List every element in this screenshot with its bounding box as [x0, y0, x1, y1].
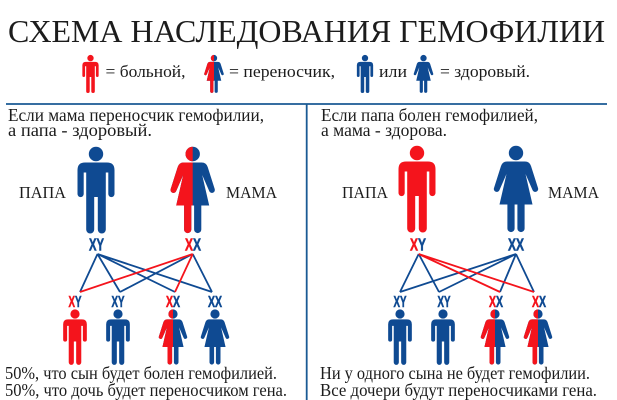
conclusion text: 50%, что дочь будет переносчиком гена. [5, 380, 287, 400]
icon: healthy daughter [201, 309, 229, 365]
icon: healthy son [106, 309, 130, 365]
icon: carrier daughter [159, 309, 187, 365]
icon: healthy woman [414, 55, 433, 93]
icon: mother carrier [171, 147, 215, 233]
conclusion text: 50%, что сын будет болен гемофилией. [5, 363, 277, 383]
chromosomes: mother: XX [185, 234, 201, 254]
chromosomes: child 3: XX [489, 294, 503, 311]
inheritance lines [400, 254, 534, 292]
label: mother: МАМА [226, 183, 278, 202]
chromosomes: child 1: XY [68, 294, 82, 311]
title: СХЕМА НАСЛЕДОВАНИЯ ГЕМОФИЛИИ [8, 13, 605, 49]
icon: carrier daughter 1 [481, 309, 509, 365]
icon: carrier woman [204, 55, 224, 93]
icon: healthy son 2 [431, 309, 455, 365]
icon: mother healthy [494, 146, 538, 232]
panel: father sick [320, 105, 600, 400]
label: father: ПАПА [19, 183, 67, 202]
heading: Если мама переносчик гемофилии, [8, 105, 264, 125]
icon: father sick [398, 146, 436, 232]
chromosomes: father: XY [89, 234, 104, 254]
chromosomes: child 2: XY [112, 294, 125, 311]
panel: mother carrier [5, 105, 287, 400]
conclusion text: Все дочери будут переносчиками гена. [320, 380, 597, 400]
chromosomes: father: XY [410, 234, 426, 254]
icon: carrier daughter 2 [524, 309, 552, 365]
legend text: sick: = больной, [106, 62, 186, 81]
chromosomes: child 2: XY [438, 294, 451, 311]
icon: sick son [63, 309, 87, 365]
icon: healthy son 1 [388, 309, 412, 365]
heading: Если папа болен гемофилией, [321, 105, 538, 125]
label: father: ПАПА [342, 183, 389, 202]
chromosomes: mother: XX [508, 234, 524, 254]
chromosomes: child 4: XX [532, 294, 546, 311]
chromosomes: child 1: XY [394, 294, 407, 311]
label: mother: МАМА [548, 183, 600, 202]
icon: father healthy [78, 147, 114, 234]
chromosomes: child 4: XX [208, 294, 222, 311]
inheritance lines [80, 254, 212, 292]
icon: healthy man [357, 55, 373, 93]
icon: sick man [82, 55, 99, 93]
chromosomes: child 3: XX [166, 294, 180, 311]
heading: а папа - здоровый. [8, 120, 152, 140]
legend text: carrier: = переносчик, [229, 62, 335, 81]
legend text: healthy: = здоровый. [440, 62, 530, 81]
legend [82, 55, 530, 93]
conclusion text: Ни у одного сына не будет гемофилии. [320, 363, 590, 383]
legend text: or: или [379, 62, 407, 81]
heading: а мама - здорова. [321, 120, 447, 140]
